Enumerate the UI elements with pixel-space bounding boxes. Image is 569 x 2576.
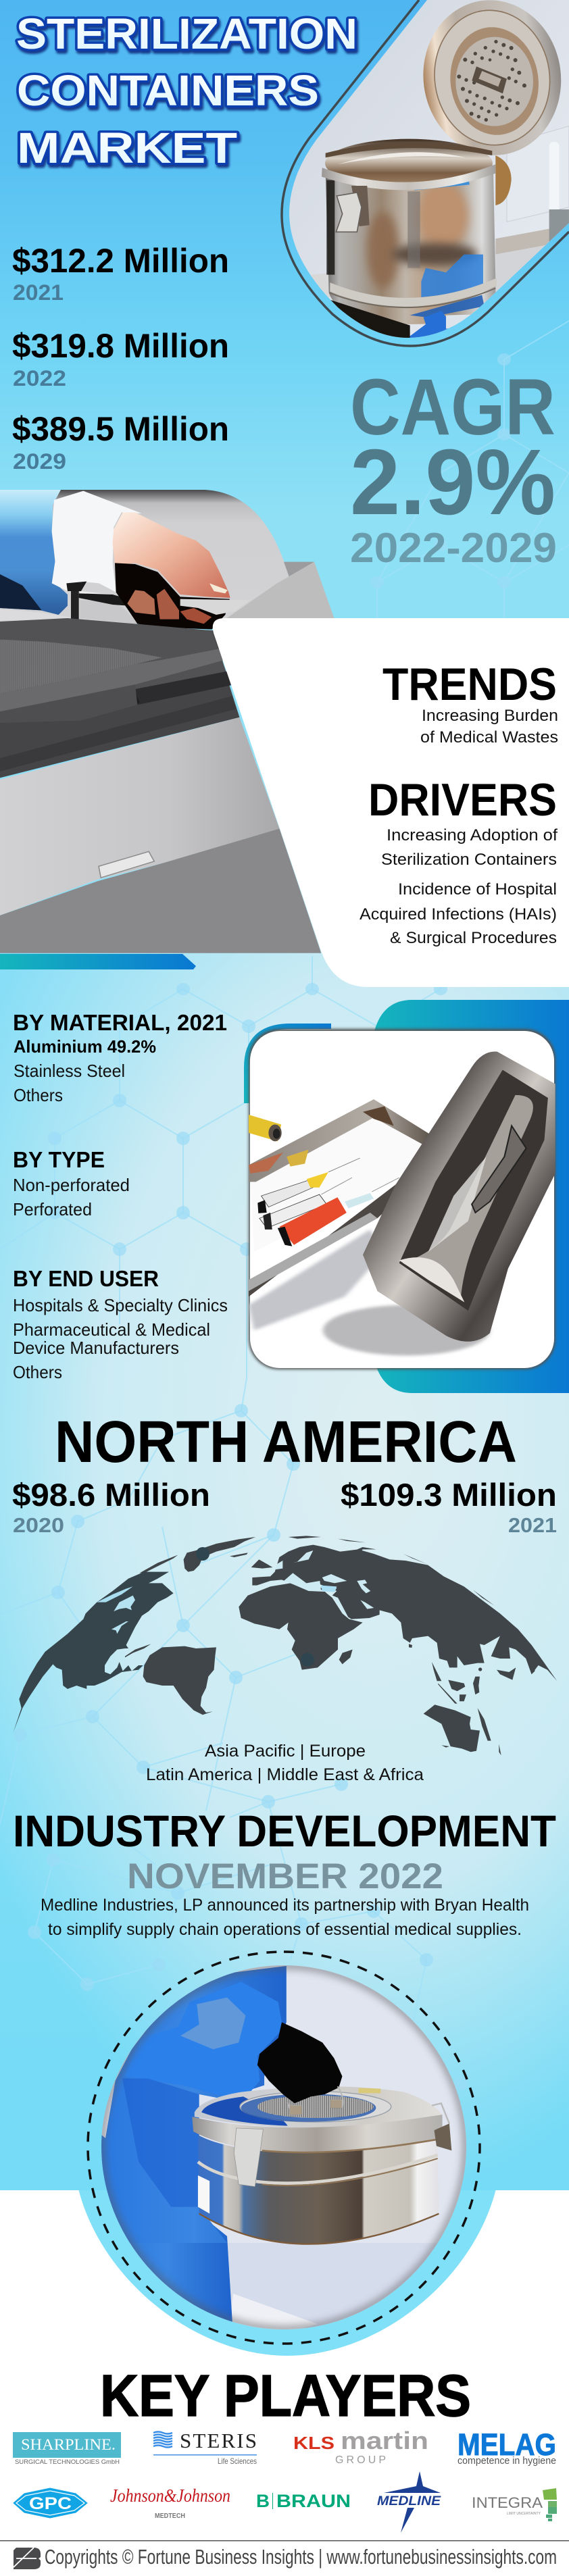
container body — [326, 171, 495, 324]
logo: integra: INTEGRA — [472, 2494, 543, 2511]
trends: of Medical Wastes — [420, 728, 558, 747]
photo: open sterilization container — [270, 0, 569, 358]
north america 2021 value: $109.3 Million — [341, 1477, 557, 1513]
value 2029: $389.5 Million — [12, 410, 229, 448]
heading: industry development: to simplify supply chain operations of essential medical supplies. — [48, 1920, 522, 1939]
value 2022 — [12, 327, 229, 390]
by material — [13, 1010, 227, 1105]
other regions: Asia Pacific | Europe — [205, 1742, 366, 1761]
drivers: Acquired Infections (HAIs) — [360, 905, 557, 924]
logo: johnson and johnson — [110, 2485, 230, 2520]
dashed egg outline — [88, 1952, 480, 2344]
photo: gloved hand lifting container lid — [101, 1959, 470, 2338]
by type: BY TYPE — [13, 1147, 105, 1172]
by end user: BY END USER — [13, 1266, 159, 1291]
logo: melag: MELAG — [457, 2427, 556, 2462]
by type — [13, 1147, 130, 1219]
logo: kls martin — [293, 2427, 428, 2466]
market values — [12, 242, 229, 474]
logo: johnson and johnson: MEDTECH — [155, 2512, 185, 2520]
segmentation lists — [13, 1010, 228, 1382]
lid — [423, 0, 561, 155]
background molecular network — [0, 321, 569, 2027]
drivers: Increasing Adoption of — [387, 826, 558, 844]
footer logo — [14, 2548, 41, 2569]
logo: integra: LIMIT UNCERTAINTY — [507, 2512, 541, 2516]
white lower section — [0, 2190, 569, 2576]
photo: metal trays and syringes — [249, 1029, 555, 1369]
logo: sharpline — [13, 2432, 121, 2466]
logo: medline — [377, 2471, 441, 2533]
logo: gpc: GPC — [29, 2494, 72, 2513]
trends: Increasing Burden — [422, 707, 558, 725]
logo: sharpline: SHARPLINE. — [21, 2436, 116, 2453]
trends: TRENDS — [382, 659, 557, 710]
logo: steris — [153, 2429, 257, 2466]
accent arc — [247, 1026, 331, 1103]
logo: kls martin: GROUP — [335, 2454, 386, 2466]
logo: b braun — [256, 2491, 351, 2511]
drivers — [360, 774, 558, 947]
logo: integra — [472, 2488, 557, 2521]
container rim — [325, 139, 493, 182]
heading: industry development: Medline Industries, LP announced its partnership with Bryan Health — [41, 1896, 529, 1915]
value 2029 — [12, 410, 229, 474]
logo: b braun: BRAUN — [276, 2491, 351, 2511]
title: CONTAINERS — [17, 66, 319, 115]
panel: trends and drivers — [213, 618, 569, 987]
heading: industry development — [13, 1806, 556, 1939]
heading: north america — [12, 1409, 557, 1537]
title: MARKET — [17, 124, 237, 172]
value 2021: $312.2 Million — [12, 242, 229, 280]
network nodes — [14, 353, 511, 2090]
value 2021 — [12, 242, 229, 305]
CAGR: 2022-2029 — [350, 525, 557, 572]
by material: Stainless Steel — [14, 1061, 125, 1081]
value 2021: 2021 — [13, 280, 64, 305]
CAGR — [350, 363, 557, 572]
logo: kls martin: KLS — [293, 2433, 335, 2453]
by material: Aluminium 49.2% — [14, 1036, 156, 1057]
CAGR: 2.9% — [350, 430, 555, 534]
drivers: & Surgical Procedures — [390, 929, 557, 947]
drivers: Incidence of Hospital — [398, 880, 557, 899]
logo: b braun: B — [256, 2491, 270, 2511]
americas — [13, 1537, 255, 1733]
other regions — [146, 1742, 424, 1784]
title — [16, 9, 357, 172]
logo: gpc — [14, 2488, 87, 2518]
logo: medline: MEDLINE — [377, 2494, 441, 2508]
other regions: Latin America | Middle East & Africa — [146, 1765, 424, 1784]
photo: hand on tray container — [0, 490, 335, 953]
europe africa asia australia — [239, 1536, 557, 1755]
north america 2020 value: $98.6 Million — [12, 1477, 210, 1513]
logo: kls martin: martin — [341, 2427, 428, 2454]
value 2022: 2022 — [13, 366, 66, 390]
by type: Perforated — [13, 1199, 92, 1219]
world map globe — [13, 1536, 557, 1755]
logo: johnson and johnson: Johnson&Johnson — [110, 2485, 230, 2506]
logo: melag: competence in hygiene — [457, 2456, 556, 2467]
glove — [408, 311, 453, 338]
latch — [351, 186, 370, 226]
panel: teal backing block — [374, 1000, 569, 1393]
by end user: Device Manufacturers — [13, 1338, 179, 1358]
logo: steris: STERIS — [180, 2429, 257, 2452]
by type: Non-perforated — [13, 1175, 130, 1195]
north america 2021 value — [341, 1477, 557, 1537]
trends — [382, 659, 558, 747]
drivers: Sterilization Containers — [381, 851, 557, 869]
egg-shaped blue ring — [78, 2190, 496, 2356]
by end user — [13, 1266, 228, 1382]
north america 2021 value: 2021 — [508, 1513, 557, 1537]
logo: sharpline: SURGICAL TECHNOLOGIES GmbH — [15, 2458, 120, 2466]
heading: industry development: NOVEMBER 2022 — [127, 1857, 443, 1896]
by material: BY MATERIAL, 2021 — [13, 1010, 227, 1035]
heading: key players: KEY PLAYERS — [100, 2363, 471, 2429]
by end user: Hospitals & Specialty Clinics — [13, 1295, 228, 1315]
by material: Others — [14, 1085, 63, 1105]
value 2029: 2029 — [13, 449, 66, 474]
logo: steris: Life Sciences — [218, 2456, 257, 2466]
north america 2020 value — [12, 1477, 210, 1537]
by end user: Pharmaceutical & Medical — [13, 1319, 210, 1340]
north america 2020 value: 2020 — [13, 1513, 64, 1537]
footer divider — [0, 2540, 569, 2542]
by end user: Others — [13, 1362, 62, 1382]
teal bar under photo — [0, 954, 196, 969]
drivers: DRIVERS — [368, 774, 557, 826]
heading: north america: NORTH AMERICA — [55, 1409, 517, 1475]
value 2022: $319.8 Million — [12, 327, 229, 365]
title: STERILIZATION — [16, 9, 357, 58]
